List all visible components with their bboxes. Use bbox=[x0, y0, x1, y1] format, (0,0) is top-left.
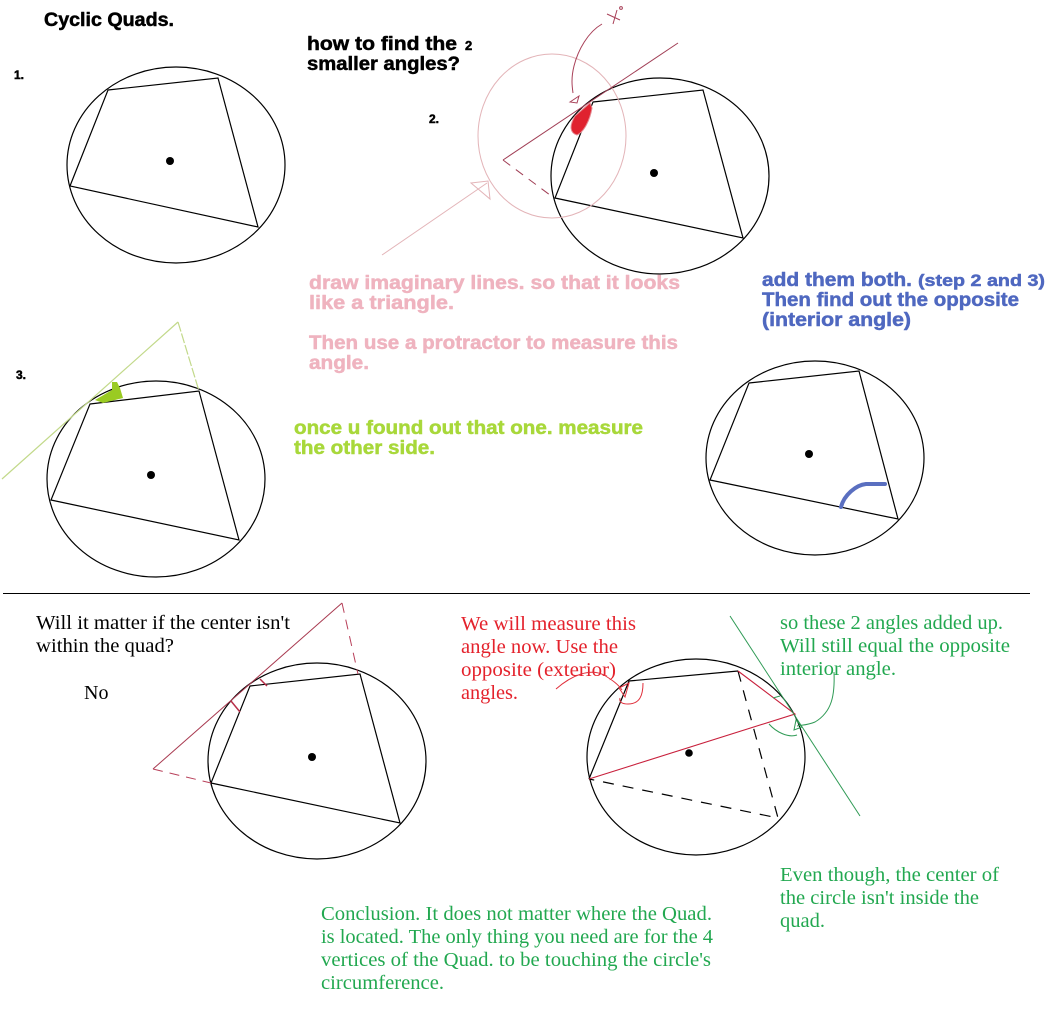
conclusion bbox=[321, 903, 713, 994]
x degrees annotation bbox=[570, 7, 622, 103]
red text: angle now. Use the bbox=[461, 636, 618, 658]
dashed side bbox=[503, 160, 554, 198]
blue instructions: add them both. bbox=[762, 270, 912, 291]
red dashed sides bbox=[153, 603, 358, 783]
green annotation arrows bbox=[769, 672, 834, 736]
green note: center outside: quad. bbox=[780, 910, 825, 932]
diagram 5: quad with red triangle bbox=[153, 603, 426, 859]
tangent line bbox=[503, 43, 678, 160]
conclusion: circumference. bbox=[321, 972, 444, 994]
conclusion: Conclusion. It does not matter where the Quad. bbox=[321, 903, 712, 925]
green text: angles added: Will still equal the opposite bbox=[780, 635, 1010, 657]
green text: angles added: so these 2 angles added up. bbox=[780, 612, 1003, 634]
green tangent line bbox=[730, 616, 860, 816]
red text: We will measure this bbox=[461, 613, 636, 635]
diagram 3: quad with green triangle bbox=[2, 322, 265, 577]
green note: center outside bbox=[780, 864, 999, 932]
dashed sides bbox=[589, 671, 778, 818]
construction circle bbox=[478, 54, 626, 218]
solid sides bbox=[589, 671, 738, 779]
pink instructions: Then use a protractor to measure this bbox=[309, 333, 678, 354]
red angle ticks bbox=[231, 679, 267, 712]
green instructions: once u found out that one. measure bbox=[294, 418, 643, 439]
question heading: smaller angles? bbox=[307, 54, 460, 75]
answer: No bbox=[84, 682, 108, 704]
pink instructions: like a triangle. bbox=[309, 293, 454, 314]
label: figure 3: 3. bbox=[16, 368, 26, 382]
red angle mark bbox=[571, 103, 592, 135]
red text: opposite (exterior) bbox=[461, 659, 616, 681]
red text: angles. bbox=[461, 682, 518, 704]
title: Cyclic Quads. bbox=[44, 10, 174, 31]
pink instructions bbox=[309, 273, 680, 374]
green note: center outside: the circle isn't inside the bbox=[780, 887, 979, 909]
question text: Will it matter if the center isn't bbox=[36, 612, 290, 634]
green angle mark bbox=[95, 382, 123, 403]
conclusion: is located. The only thing you need are for the 4 bbox=[321, 926, 713, 948]
diagram 6: quad with dashed sides and tangent bbox=[556, 616, 860, 855]
pink instructions: draw imaginary lines. so that it looks bbox=[309, 273, 680, 294]
green note: center outside: Even though, the center of bbox=[780, 864, 999, 886]
blue instructions: (interior angle) bbox=[762, 310, 911, 331]
label: figure 2: 2. bbox=[429, 112, 439, 126]
red text bbox=[461, 613, 636, 704]
green tangent line bbox=[2, 322, 178, 479]
diagram 1: cyclic quad bbox=[67, 67, 285, 263]
red tangent line bbox=[153, 603, 342, 769]
green instructions bbox=[294, 418, 643, 459]
green text: angles added: interior angle. bbox=[780, 658, 896, 680]
question heading bbox=[307, 34, 472, 75]
green instructions: the other side. bbox=[294, 438, 435, 459]
question heading: how to find the bbox=[307, 34, 457, 55]
pink instructions: angle. bbox=[309, 353, 369, 374]
diagram 2: quad with exterior triangle bbox=[382, 7, 769, 274]
conclusion: vertices of the Quad. to be touching the circle's bbox=[321, 949, 711, 971]
green text: angles added bbox=[780, 612, 1010, 680]
label: figure 1: 1. bbox=[14, 68, 24, 82]
blue instructions: Then find out the opposite bbox=[762, 290, 1019, 311]
blue instructions: (step 2 and 3) bbox=[918, 271, 1045, 290]
green dashed side bbox=[178, 322, 199, 391]
question text bbox=[36, 612, 290, 657]
red annotation arrow bbox=[556, 672, 643, 704]
pink arrow bbox=[382, 181, 490, 255]
blue instructions bbox=[762, 270, 1045, 331]
diagram 4: quad with blue interior angle bbox=[706, 361, 924, 555]
question text: within the quad? bbox=[36, 635, 174, 657]
red diagonal and side bbox=[589, 671, 795, 779]
question heading: 2 bbox=[465, 38, 472, 53]
blue angle arc bbox=[841, 484, 885, 507]
